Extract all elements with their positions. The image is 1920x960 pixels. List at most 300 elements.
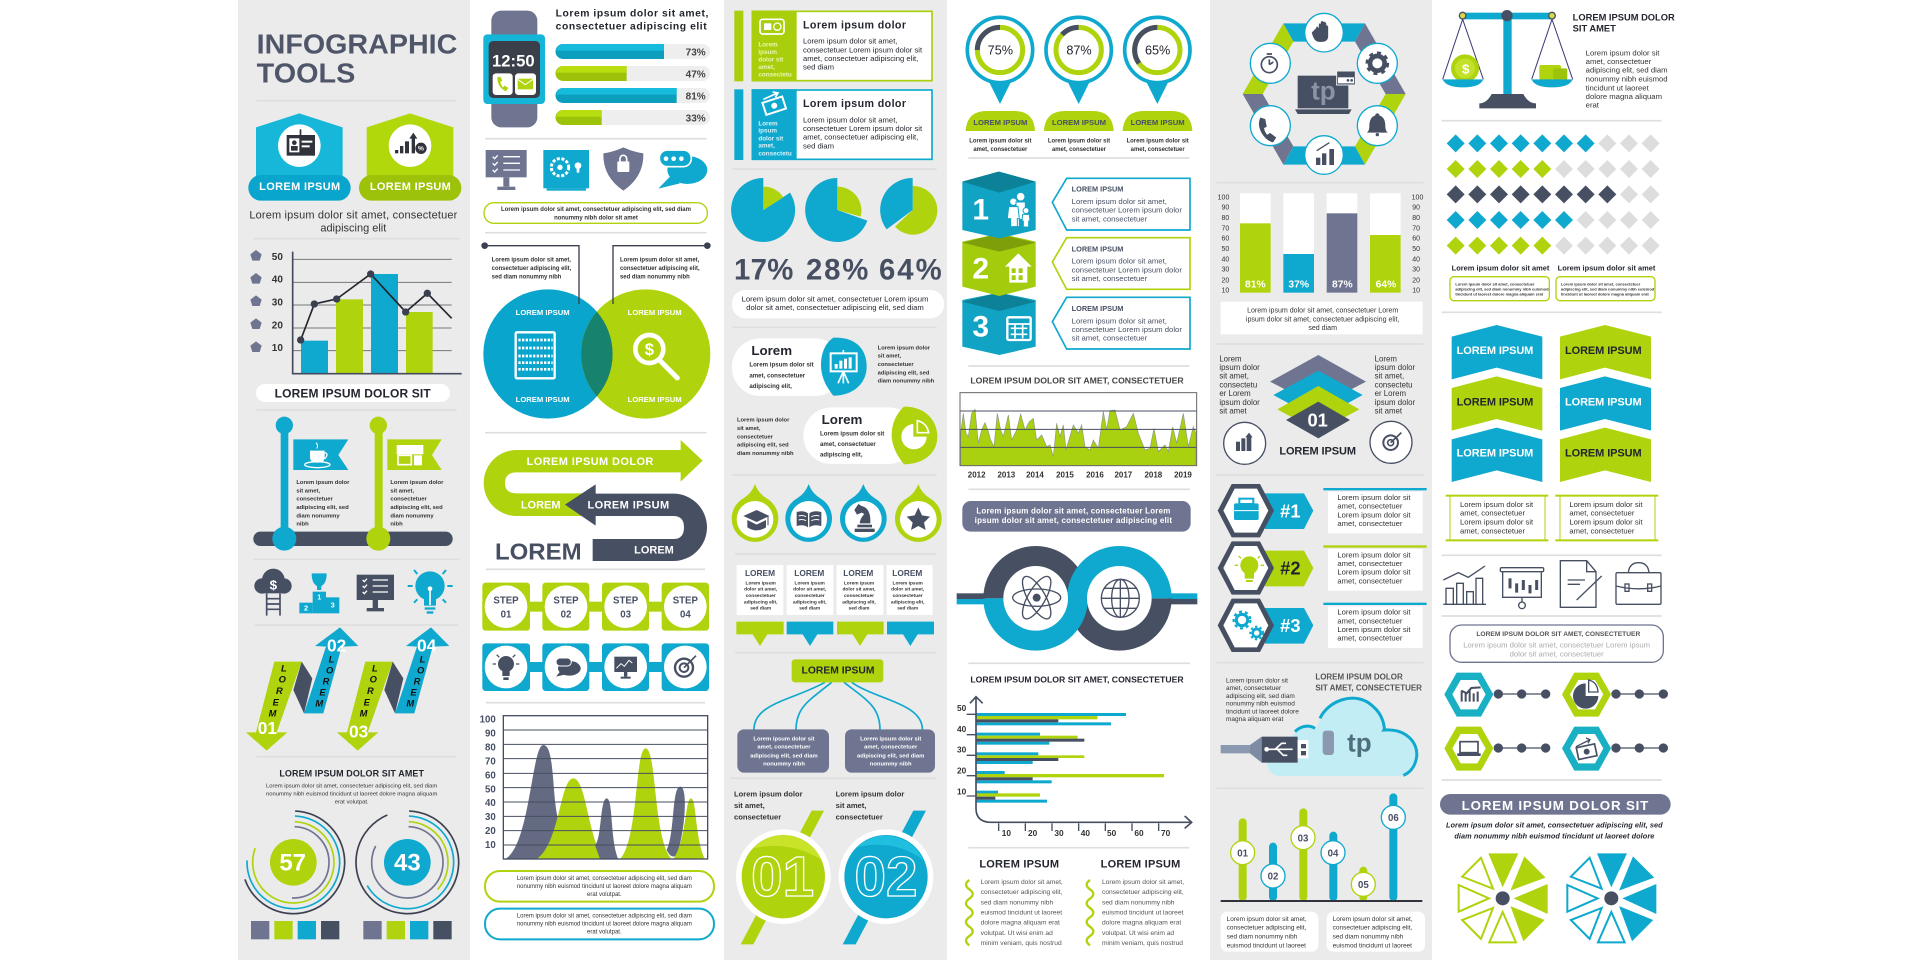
- icon: checklist monitor: [486, 150, 527, 190]
- four labelled cards: LOREM: [843, 568, 873, 578]
- number medallion 02: 02: [854, 846, 918, 909]
- leaf callout: teal: [732, 338, 935, 396]
- callout 3: sit amet, consectetuer: [1072, 334, 1148, 343]
- four labelled cards: Lorem ipsum: [795, 580, 825, 586]
- framed notes: Lorem ipsum dolor sit: [1569, 500, 1643, 509]
- radial chart 57: [240, 809, 346, 915]
- hex node: laptop: [1444, 727, 1550, 771]
- heading and text: Lorem ipsum dolor sit amet, consectetuer adipiscing elit, sed diam: [266, 784, 437, 790]
- framed notes: Lorem ipsum dolor sit: [1460, 500, 1534, 509]
- column bars: 70: [1222, 225, 1229, 232]
- bar and line chart: 30: [272, 297, 283, 308]
- callout 1: consectetuer Lorem ipsum dolor: [1072, 206, 1182, 215]
- cube 3: 3: [972, 311, 989, 344]
- note: sed diam: [1308, 325, 1337, 332]
- column bars: 37%: [1288, 279, 1309, 290]
- timeline flags: consectetuer: [296, 497, 334, 503]
- venn diagram: [481, 242, 711, 419]
- card: green: consectetu: [758, 72, 792, 79]
- green note: nonummy nibh euismod tincidunt ut laoreet dolore magna aliquam: [517, 884, 692, 890]
- text block right: volutpat. Ut wisi enim ad: [1102, 930, 1174, 937]
- pin gauge 87%: 87%: [1066, 43, 1092, 57]
- leaf callout: green: Lorem: [822, 412, 863, 427]
- text block right: consectetuer adipiscing elit,: [1102, 889, 1184, 896]
- layered diamonds: LOREM IPSUM: [1279, 445, 1356, 457]
- step chain: 04: [680, 609, 691, 620]
- card: teal: dolor sit: [758, 135, 784, 142]
- step chain: STEP: [613, 596, 639, 607]
- org tree: amet, consectetuer: [864, 745, 918, 751]
- text cards: consectetuer adipiscing elit,: [1227, 925, 1307, 932]
- text cards: Lorem ipsum dolor sit amet,: [1227, 916, 1307, 923]
- callout 2: consectetuer Lorem ipsum dolor: [1072, 265, 1182, 274]
- callout 3: Lorem ipsum dolor sit amet,: [1072, 316, 1167, 325]
- smart watch: [483, 11, 545, 127]
- teal note: erat volutpat.: [587, 929, 622, 935]
- leaf callout: teal: Lorem ipsum dolor: [878, 345, 931, 351]
- step chain: 03: [620, 609, 632, 620]
- text block right: dolore magna aliquam erat: [1102, 920, 1181, 927]
- venn diagram: consectetuer adipiscing elit,: [492, 266, 572, 272]
- layered diamonds: sit amet: [1375, 407, 1403, 416]
- framed notes: amet, consectetuer: [1569, 526, 1635, 535]
- layered diamonds: [1219, 354, 1416, 464]
- leaf callout: green: sit amet,: [737, 426, 761, 432]
- area chart: 40: [485, 798, 496, 809]
- pictogram legends: Lorem ipsum dolor sit amet: [1558, 264, 1656, 273]
- timeline flags: consectetuer: [390, 497, 428, 503]
- dome labels: Lorem ipsum dolor sit: [1127, 139, 1189, 145]
- column bars: 30: [1222, 267, 1229, 274]
- layered diamonds: er Lorem: [1219, 389, 1251, 398]
- percent figures: 17%: [734, 253, 793, 286]
- layered diamonds: ipsum dolor: [1219, 398, 1260, 407]
- timeline flags: sit amet,: [390, 488, 414, 494]
- callout 1: [1052, 178, 1190, 230]
- text block left: volutpat. Ut wisi enim ad: [981, 930, 1053, 937]
- text block left: consectetuer adipiscing elit,: [981, 889, 1063, 896]
- twisted arrows 03 04: LOREM: [360, 664, 378, 719]
- four labelled cards: dolor sit amet,: [891, 587, 925, 593]
- USB cloud: [1221, 672, 1422, 776]
- venn diagram: $: [645, 340, 655, 359]
- pictogram legends: Lorem ipsum dolor sit amet, consectetuer: [1561, 281, 1641, 286]
- headline: Lorem ipsum dolor sit amet,: [556, 9, 708, 20]
- ranked item 3: [1218, 599, 1427, 652]
- ranked item 2: [1218, 541, 1427, 595]
- icon: chat bubbles: [658, 150, 707, 189]
- lollipop sliders: 02: [1268, 872, 1278, 883]
- number medallion 01: Lorem ipsum dolor: [734, 790, 803, 799]
- org tree: adipiscing elit, sed diam: [750, 753, 818, 759]
- number medallion 02: Lorem ipsum dolor: [836, 790, 904, 799]
- twisted arrows 01 02: LOREM: [315, 655, 335, 709]
- step chain: [482, 583, 709, 631]
- layered diamonds: Lorem: [1375, 354, 1397, 363]
- leaf callout: green: consectetuer: [737, 434, 774, 440]
- leaf callout: green: amet, consectetuer: [820, 441, 876, 448]
- card: green: Lorem ipsum dolor sit amet,: [803, 37, 897, 46]
- four labelled cards: Lorem ipsum: [746, 580, 776, 586]
- number medallion 02: [836, 790, 933, 944]
- step chain: STEP: [493, 596, 519, 607]
- ranked item 1: amet, consectetuer: [1337, 502, 1403, 511]
- four labelled cards: adipiscing elit,: [793, 599, 827, 605]
- ranked item 2: amet, consectetuer: [1337, 576, 1403, 585]
- card: teal: Lorem: [758, 120, 778, 127]
- card: teal: consectetuer Lorem ipsum dolor sit: [803, 124, 923, 133]
- area chart: 80: [485, 743, 496, 754]
- caption: Lorem ipsum dolor sit amet, consectetuer: [249, 210, 458, 222]
- four labelled cards: LOREM: [745, 568, 775, 578]
- column bars: 10: [1412, 288, 1420, 295]
- dome labels: Lorem ipsum dolor sit: [969, 139, 1031, 145]
- area chart: 50: [485, 784, 496, 795]
- card: green: amet,: [758, 64, 775, 71]
- venn diagram: LOREM IPSUM: [628, 395, 682, 404]
- twisted arrows 03 04: LOREM: [406, 655, 426, 709]
- card: green: amet, consectetuer adipiscing elit,: [803, 54, 918, 63]
- text block right: Lorem ipsum dolor sit amet,: [1102, 879, 1184, 886]
- area chart: [480, 715, 708, 859]
- spiky area chart: 2015: [1056, 471, 1074, 480]
- icon: checklist monitor: [357, 575, 394, 611]
- column bars: 40: [1222, 256, 1229, 263]
- callout 2: Lorem ipsum dolor sit amet,: [1072, 257, 1167, 266]
- layered diamonds: consectetu: [1219, 380, 1257, 389]
- org tree: nonummy nibh: [870, 762, 912, 768]
- timeline flags: nibh: [390, 521, 403, 527]
- leaf callout: teal: sit amet,: [878, 354, 902, 360]
- chevron labels: LOREM IPSUM: [1565, 396, 1642, 408]
- four labelled cards: adipiscing elit,: [842, 599, 876, 605]
- balance scale: adipiscing elit, sed diam: [1586, 66, 1668, 75]
- horizontal bar chart: 30: [1054, 828, 1064, 838]
- text cards: consectetuer adipiscing elit,: [1333, 925, 1413, 932]
- icon: lightbulb: [408, 570, 453, 614]
- card: green: [734, 11, 932, 81]
- four labelled cards: adipiscing elit,: [891, 599, 925, 605]
- card: green: dolor sit: [758, 57, 784, 64]
- USB cloud: nonummy nibh euismod: [1226, 701, 1295, 708]
- S-shaped arrows: LOREM: [521, 499, 560, 511]
- column bars: 80: [1412, 215, 1420, 222]
- number medallion 01: [734, 790, 831, 944]
- headline: consectetuer adipiscing elit: [556, 21, 707, 32]
- ranked item 3: Lorem ipsum dolor sit: [1337, 625, 1411, 634]
- leaf callout: teal: Lorem ipsum dolor sit: [749, 362, 814, 369]
- hexagon icon ring: tp: [1311, 75, 1336, 105]
- timeline flags: sit amet,: [296, 488, 320, 494]
- text cards: [1221, 912, 1425, 952]
- org tree: LOREM IPSUM: [802, 665, 874, 676]
- note pill: Lorem ipsum dolor sit amet, consectetuer Lorem ipsum: [742, 294, 928, 303]
- dome labels: LOREM IPSUM: [1052, 118, 1106, 127]
- bar and line chart: 10: [272, 343, 283, 354]
- pie 64%: [880, 178, 937, 235]
- ranked item 3: #3: [1280, 615, 1301, 636]
- card: teal: Lorem ipsum dolor: [803, 98, 906, 110]
- pictogram legends: [1450, 264, 1656, 301]
- diamond pictogram: [1447, 134, 1660, 255]
- spiky area chart: [960, 393, 1197, 480]
- pie 28%: [805, 178, 867, 242]
- hex node: bar chart: [1444, 673, 1550, 717]
- cube 3: [962, 293, 1036, 355]
- horizontal bar chart: 20: [1028, 828, 1038, 838]
- cube 1: 1: [972, 193, 989, 226]
- venn diagram: sed diam nonummy nibh: [492, 274, 562, 280]
- chevron labels: [1452, 325, 1651, 482]
- four labelled cards: sed diam: [799, 605, 820, 611]
- org tree: Lorem ipsum dolor sit: [753, 736, 815, 742]
- column bars: 50: [1222, 246, 1229, 253]
- callout 1: Lorem ipsum dolor sit amet,: [1072, 197, 1167, 206]
- ranked item 1: Lorem ipsum dolor sit: [1337, 493, 1411, 502]
- horizontal bar chart: 50: [1107, 828, 1117, 838]
- timeline flags: Lorem ipsum dolor: [296, 480, 350, 486]
- text block left: dolore magna aliquam erat: [981, 920, 1060, 927]
- column bars: 30: [1412, 267, 1420, 274]
- column bars: 100: [1218, 194, 1229, 201]
- title: INFOGRAPHIC: [257, 28, 457, 59]
- ranked item 2: Lorem ipsum dolor sit: [1337, 568, 1411, 577]
- pin gauge 75%: 75%: [988, 43, 1013, 57]
- teal note: nonummy nibh euismod tincidunt ut laoreet dolore magna aliquam: [517, 922, 692, 928]
- venn diagram: consectetuer adipiscing elit,: [620, 266, 700, 272]
- card: green: ipsum: [758, 49, 777, 56]
- twisted arrows 01 02: LOREM: [269, 664, 287, 719]
- framed notes: [1446, 495, 1658, 541]
- teal note: Lorem ipsum dolor sit amet, consectetuer adipiscing elit, sed diam: [517, 914, 692, 920]
- progress bars: 73%: [686, 47, 706, 58]
- column 4: [957, 17, 1197, 947]
- pie 17%: [731, 178, 795, 242]
- area chart: 100: [480, 715, 496, 726]
- text cards: Lorem ipsum dolor sit amet,: [1333, 916, 1413, 923]
- four labelled cards: sed diam: [750, 605, 771, 611]
- column bars: 60: [1222, 236, 1229, 243]
- text block right: euismod tincidunt ut laoreet: [1102, 909, 1184, 916]
- S-shaped arrows: LOREM IPSUM DOLOR: [527, 456, 653, 468]
- leaf callout: teal: consectetuer: [878, 362, 914, 368]
- heading pill: [1440, 794, 1671, 815]
- lollipop sliders: 04: [1328, 848, 1339, 859]
- badge: green growth: %: [418, 146, 424, 153]
- column 5: [1217, 13, 1427, 952]
- lollipop sliders: 01: [1237, 848, 1249, 859]
- card: teal: amet,: [758, 143, 775, 150]
- twisted arrows 01 02: 01: [258, 718, 277, 738]
- framed notes: amet, consectetuer: [1460, 509, 1526, 518]
- twisted arrows 03 04: 03: [349, 721, 369, 741]
- horizontal bar chart: 10: [1002, 828, 1011, 838]
- panel: column 5 background: [1210, 0, 1432, 960]
- ranked item 1: amet, consectetuer: [1337, 519, 1403, 528]
- S-shaped arrows: LOREM: [634, 544, 674, 556]
- text block right: minim veniam, quis nostrud: [1102, 940, 1183, 947]
- lollipop sliders: 05: [1358, 880, 1369, 891]
- framed notes: Lorem ipsum dolor sit: [1569, 517, 1643, 526]
- banner: [962, 501, 1191, 532]
- percent figures: [734, 253, 942, 286]
- percent figures: 64%: [879, 253, 942, 286]
- callout 2: [1052, 238, 1190, 289]
- leaf callout: teal: diam nonummy nibh: [878, 378, 935, 384]
- colour swatches: [251, 921, 452, 939]
- USB cloud: LOREM IPSUM DOLOR: [1315, 672, 1403, 681]
- venn diagram: Lorem ipsum dolor sit amet,: [492, 258, 571, 264]
- balance scale: nonummy nibh euismod: [1586, 75, 1668, 84]
- org tree: nonummy nibh: [763, 762, 805, 768]
- step chain: STEP: [673, 596, 698, 607]
- note pill: dolor sit amet, consectetuer adipiscing elit, sed diam: [746, 303, 924, 312]
- chart title pill: [256, 384, 450, 402]
- dome labels: amet, consectetuer: [1131, 147, 1185, 153]
- number medallion 01: 01: [751, 846, 814, 909]
- callout 3: consectetuer Lorem ipsum dolor: [1072, 325, 1182, 334]
- text cards: sed diam nonummy nibh: [1227, 934, 1298, 941]
- column bars: 87%: [1332, 279, 1353, 290]
- badge: green growth: [359, 113, 461, 201]
- bar chart title: LOREM IPSUM DOLOR SIT AMET, CONSECTETUER: [970, 675, 1184, 685]
- balance scale: amet, consectetuer: [1586, 57, 1652, 66]
- drop icon: star: [895, 484, 942, 542]
- note: Lorem ipsum dolor sit amet, consectetuer Lorem: [1247, 308, 1398, 315]
- icon: cloud ladder: $: [270, 577, 278, 592]
- twisted arrows 01 02: [246, 627, 358, 751]
- callout 1: sit amet, consectetuer: [1072, 214, 1148, 223]
- lollipop sliders: 06: [1388, 813, 1399, 824]
- layered diamonds: ipsum dolor: [1375, 398, 1416, 407]
- column 1: [240, 28, 462, 939]
- green note: erat volutpat.: [587, 892, 622, 898]
- outlined note: nonummy nibh dolor sit amet: [554, 215, 638, 221]
- pictogram legends: Lorem ipsum dolor sit amet: [1452, 264, 1550, 273]
- S-shaped arrows: LOREM: [495, 538, 582, 564]
- horizontal bar chart: 60: [1134, 828, 1144, 838]
- framed notes: Lorem ipsum dolor sit: [1460, 517, 1534, 526]
- area chart: 60: [485, 770, 496, 781]
- horizontal bar chart: 40: [1081, 828, 1090, 838]
- horizontal bar chart: 20: [957, 765, 967, 775]
- card: teal: Lorem ipsum dolor sit amet,: [803, 115, 897, 124]
- step chain: 01: [501, 609, 512, 620]
- column bars: 10: [1222, 288, 1229, 295]
- pictogram legends: adipiscing elit, sed diam nonummy nibh euismod: [1455, 286, 1549, 291]
- line icons: [1443, 561, 1661, 609]
- area chart: 20: [485, 826, 496, 837]
- four labelled cards: adipiscing elit,: [744, 599, 778, 605]
- pictogram legends: tincidunt ut laoreet dolore magna aliquam erat: [1455, 291, 1544, 296]
- twisted arrows 01 02: 02: [327, 635, 346, 655]
- drop icon: chess knight: [840, 484, 887, 542]
- layered diamonds: ipsum dolor: [1375, 363, 1416, 372]
- spiky area chart: 2017: [1114, 471, 1133, 480]
- area chart: 30: [485, 812, 496, 823]
- pictogram legends: tincidunt ut laoreet dolore magna aliquam erat: [1561, 291, 1649, 296]
- USB cloud: tincidunt ut laoreet dolore: [1226, 708, 1299, 715]
- percent figures: 28%: [806, 253, 868, 286]
- card: green: sed diam: [803, 63, 834, 72]
- layered diamonds: ipsum dolor: [1219, 363, 1260, 372]
- org tree: amet, consectetuer: [757, 745, 811, 751]
- balance scale: tincidunt ut laoreet: [1586, 83, 1650, 92]
- outlined text box: [1450, 625, 1663, 662]
- outlined note: Lorem ipsum dolor sit amet, consectetuer adipiscing elit, sed diam: [501, 207, 691, 213]
- leaf callout: green: Lorem ipsum dolor sit: [820, 430, 884, 437]
- ranked item 3: amet, consectetuer: [1337, 616, 1403, 625]
- framed notes: amet, consectetuer: [1569, 509, 1635, 518]
- balance scale: dolore magna aliquam: [1586, 92, 1662, 101]
- number medallion 02: consectetuer: [836, 812, 883, 821]
- badge: teal ID card: LOREM IPSUM: [259, 181, 340, 193]
- timeline flags: adipiscing elit, sed: [296, 505, 349, 511]
- org tree: adipiscing elit, sed diam: [857, 753, 924, 759]
- org tree: [737, 659, 935, 773]
- spiky area chart: 2016: [1086, 471, 1104, 480]
- dome labels: Lorem ipsum dolor sit: [1048, 139, 1110, 145]
- USB cloud: SIT AMET, CONSECTETUER: [1315, 684, 1422, 693]
- USB cloud: adipiscing elit, sed diam: [1226, 693, 1295, 700]
- column bars: 64%: [1376, 279, 1396, 290]
- line chart title: LOREM IPSUM DOLOR SIT AMET, CONSECTETUER: [970, 375, 1184, 385]
- bar and line chart: 20: [272, 320, 283, 331]
- icon: podium: 2: [304, 604, 308, 613]
- bar and line chart: 40: [272, 275, 283, 286]
- icon: shield: [603, 147, 643, 191]
- leaf callout: green: Lorem ipsum dolor: [737, 418, 790, 424]
- horizontal bar chart: 40: [957, 724, 967, 734]
- chart title pill: LOREM IPSUM DOLOR SIT: [275, 386, 431, 400]
- text cards: sed diam nonummy nibh: [1333, 934, 1404, 941]
- horizontal bar chart: 70: [1161, 828, 1171, 838]
- callout 2: sit amet, consectetuer: [1072, 274, 1148, 283]
- four labelled cards: dolor sit amet,: [842, 587, 876, 593]
- heading and text: nonummy nibh euismod tincidunt ut laoreet dolore magna aliquam: [266, 792, 437, 798]
- card: teal: amet, consectetuer adipiscing elit,: [803, 133, 918, 142]
- venn diagram: LOREM IPSUM: [628, 308, 682, 317]
- timeline flags: diam nonummy: [296, 513, 340, 519]
- dome labels: amet, consectetuer: [1052, 147, 1107, 153]
- callout 3: LOREM IPSUM: [1072, 304, 1123, 313]
- column bars: 60: [1412, 236, 1420, 243]
- four labelled cards: LOREM: [892, 568, 922, 578]
- area chart: 90: [485, 729, 496, 740]
- timeline flags: Lorem ipsum dolor: [390, 480, 444, 486]
- step chain: STEP: [553, 596, 579, 607]
- column bars: [1218, 193, 1423, 295]
- chevron labels: LOREM IPSUM: [1457, 396, 1533, 408]
- four labelled cards: consectetuer: [746, 593, 776, 599]
- layered diamonds: Lorem: [1219, 354, 1242, 363]
- layered diamonds: sit amet,: [1219, 372, 1249, 381]
- green note: Lorem ipsum dolor sit amet, consectetuer adipiscing elit, sed diam: [517, 876, 692, 882]
- card: teal: [734, 89, 932, 160]
- card: teal: consectetu: [758, 150, 792, 157]
- four labelled cards: sed diam: [849, 605, 869, 611]
- spiky area chart: 2018: [1144, 471, 1163, 480]
- leaf callout: green: adipiscing elit, sed: [737, 443, 789, 449]
- lollipop sliders: 03: [1298, 833, 1309, 844]
- text block left: [966, 859, 1063, 947]
- USB cloud: Lorem ipsum dolor sit: [1226, 677, 1288, 684]
- balance scale: LOREM IPSUM DOLOR: [1573, 13, 1675, 23]
- heading and text: LOREM IPSUM DOLOR SIT AMET: [279, 769, 424, 779]
- column 6: [1440, 10, 1675, 942]
- column bars: 20: [1222, 277, 1229, 284]
- ranked item 3: amet, consectetuer: [1337, 634, 1403, 643]
